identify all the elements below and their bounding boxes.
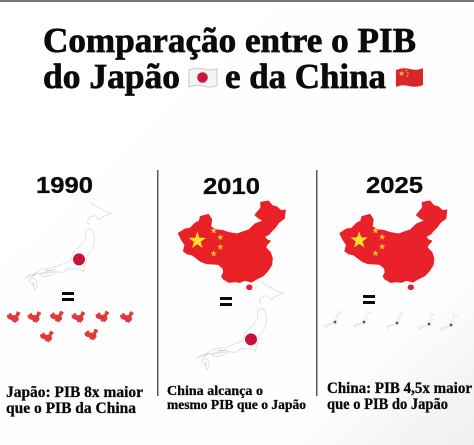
title: e da China bbox=[225, 57, 386, 96]
equals sign 1990 bbox=[62, 292, 74, 301]
caption 1990 bbox=[6, 384, 143, 417]
top grey band bbox=[0, 0, 474, 2]
map of China 2010 bbox=[178, 201, 285, 290]
caption 2010 bbox=[167, 383, 306, 412]
panel: 1990 bbox=[6, 172, 143, 417]
divider right bbox=[316, 170, 318, 396]
map of China 2025 bbox=[340, 201, 447, 290]
caption 2025: China: PIB 4,5x maior bbox=[327, 380, 472, 397]
title bbox=[43, 21, 416, 96]
panel: 2025 bbox=[324, 172, 472, 413]
title: do Japão bbox=[43, 57, 180, 96]
equals sign 2010 bbox=[220, 297, 232, 306]
year 1990: 1990 bbox=[36, 172, 93, 198]
row of five small Japan maps bbox=[324, 310, 458, 331]
caption 1990: que o PIB da China bbox=[6, 400, 136, 417]
title: Comparação entre o PIB bbox=[43, 21, 416, 60]
map of Japan 2010 bbox=[197, 281, 284, 370]
caption 2025 bbox=[327, 380, 472, 413]
map of Japan 1990 bbox=[25, 201, 112, 290]
icon: China flag bbox=[396, 68, 423, 87]
caption 1990: Japão: PIB 8x maior bbox=[6, 384, 143, 401]
icon: Japan flag bbox=[189, 68, 217, 87]
caption 2025: que o PIB do Japão bbox=[327, 396, 448, 413]
equals sign 2025 bbox=[363, 295, 375, 304]
caption 2010: mesmo PIB que o Japão bbox=[167, 397, 306, 412]
row of eight small China maps bbox=[7, 311, 133, 342]
year 2010: 2010 bbox=[203, 173, 260, 199]
panel: 2010 bbox=[167, 173, 306, 412]
year 2025: 2025 bbox=[366, 172, 423, 198]
caption 2010: China alcança o bbox=[167, 383, 263, 398]
divider left bbox=[157, 170, 158, 396]
